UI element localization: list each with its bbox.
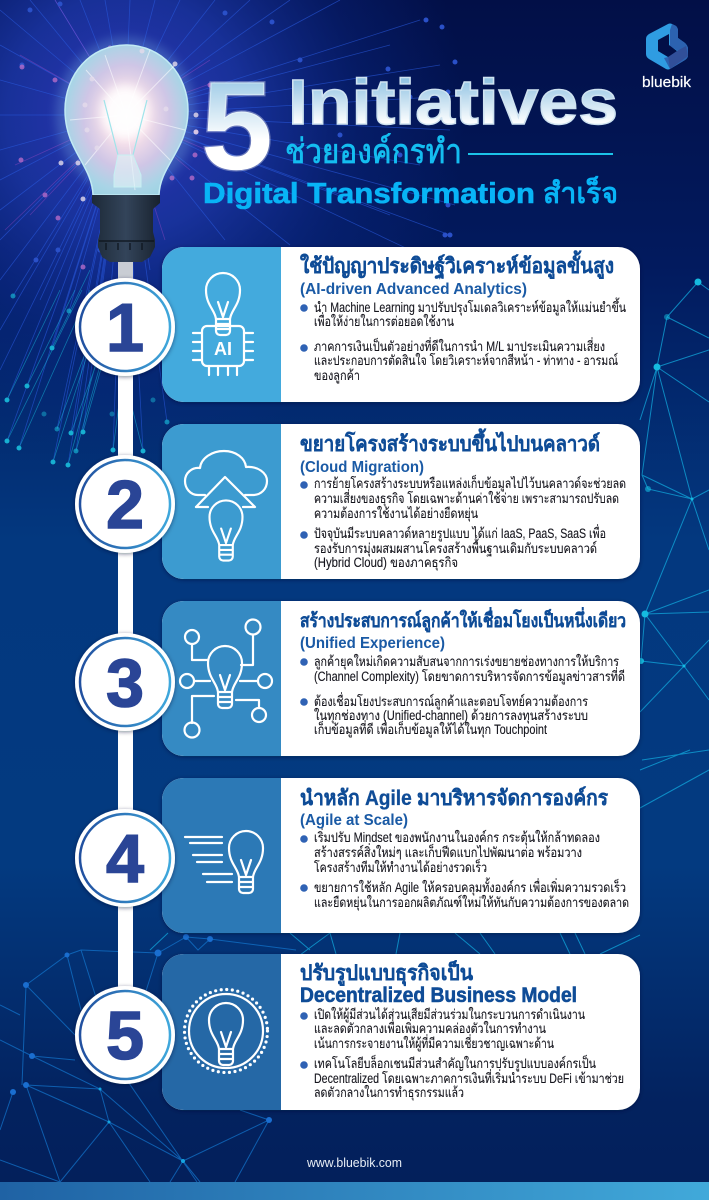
panel: 4 Agile at Scale: สร้างสรรค์สิ่งใหม่ๆ และเก็บฟีดแบกไปพัฒนาต่อ พร้อมวาง <box>314 843 582 860</box>
footer: website: www.bluebik.com <box>306 1155 402 1170</box>
number 1: 1 <box>106 290 144 366</box>
panel: 1 AI-driven Advanced Analytics: นำ Machine Learning มาปรับปรุงโมเดลวิเคราะห์ข้อมูลให้แม่นยำขึ้น <box>314 297 626 316</box>
panel: 4 Agile at Scale: เริ่มปรับ Mindset ของพนักงานในองค์กร กระตุ้นให้กล้าทดลอง <box>314 828 600 846</box>
panel: 2 Cloud Migration: ความต้องการใช้งานได้อย่างยืดหยุ่น <box>314 505 478 522</box>
panel: 3 Unified Experience <box>75 601 640 756</box>
panel: 1 AI-driven Advanced Analytics <box>75 247 640 402</box>
panel: 1 AI-driven Advanced Analytics: เพื่อให้ง่ายในการต่อยอดใช้งาน <box>314 312 454 329</box>
panel: 5 Decentralized Business Model: ลดตัวกลางในการทำธุรกรรมแล้ว <box>314 1084 464 1101</box>
panel: 4 Agile at Scale: โครงสร้างทีมให้ทำงานได้อย่างรวดเร็ว <box>314 858 487 875</box>
panel: 1 AI-driven Advanced Analytics: และประกอบการตัดสินใจ โดยวิเคราะห์จากสีหน้า - ท่าทาง - อารมณ์ <box>314 352 618 368</box>
title: 5 <box>201 55 273 196</box>
panel: 5 Decentralized Business Model: Decentralized Business Model <box>300 984 577 1007</box>
logo: bluebik: bluebik <box>642 74 692 91</box>
number 3 <box>75 633 175 731</box>
panel: 2 Cloud Migration: (Cloud Migration) <box>300 459 424 476</box>
icon: bulb in dotted circle <box>184 990 268 1072</box>
number 5 <box>75 986 175 1084</box>
network lines: bottom left <box>0 937 296 1182</box>
panel: 4 Agile at Scale <box>75 778 640 933</box>
title: ช่วยองค์กรทำ <box>285 133 462 171</box>
panel: 2 Cloud Migration: ปัจจุบันมีระบบคลาวด์หลายรูปแบบ ได้แก่ IaaS, PaaS, SaaS เพื่อ <box>314 524 606 542</box>
panel: 3 Unified Experience: ในทุกช่องทาง (Unified-channel) ด้วยการลงทุนสร้างระบบ <box>314 707 588 724</box>
icon: cloud and bulb <box>185 451 267 561</box>
panel: 5 Decentralized Business Model: และลดตัวกลางเพื่อเพิ่มความคล่องตัวในการทำงาน <box>314 1019 546 1036</box>
panel: 1 AI-driven Advanced Analytics: (AI-driven Advanced Analytics) <box>300 281 527 298</box>
title: Digital Transformation <box>203 178 535 210</box>
number 2 <box>75 455 175 553</box>
panel: 2 Cloud Migration <box>75 424 640 579</box>
icon: AI chip bulb <box>193 273 253 375</box>
panel: 3 Unified Experience: (Channel Complexity) โดยขาดการบริหารจัดการข้อมูลข่าวสารที่ดี <box>314 667 625 685</box>
panel: 2 Cloud Migration: (Hybrid Cloud) ของภาคธุรกิจ <box>314 555 458 571</box>
panel: 1 AI-driven Advanced Analytics: ภาคการเงินเป็นตัวอย่างที่ดีในการนำ M/L มาประเมินความเสี่ยง <box>314 337 605 354</box>
panel: 5 Decentralized Business Model <box>75 954 640 1110</box>
panel: 2 Cloud Migration: ขยายโครงสร้างระบบขึ้นไปบนคลาวด์ <box>300 428 600 456</box>
panel: 3 Unified Experience: (Unified Experience) <box>300 635 445 652</box>
panel: 5 Decentralized Business Model: เน้นการกระจายงานให้ผู้ที่มีความเชี่ยวชาญเฉพาะด้าน <box>314 1034 554 1052</box>
panel: 5 Decentralized Business Model: Decentralized โดยเฉพาะภาคการเงินที่เริ่มนำระบบ DeFi เข้ามาช่วย <box>314 1069 624 1086</box>
icon: bulb socket <box>92 195 160 262</box>
panel: 3 Unified Experience: ลูกค้ายุคใหม่เกิดความสับสนจากการเร่งขยายช่องทางการให้บริการ <box>314 653 619 670</box>
panel: 3 Unified Experience: ต้องเชื่อมโยงประสบการณ์ลูกค้าและตอบโจทย์ความต้องการ <box>314 692 588 710</box>
panel: 1 AI-driven Advanced Analytics: ของลูกค้า <box>314 368 360 384</box>
icon: speed lines and bulb <box>185 831 263 893</box>
icon: AI chip bulb: AI <box>214 339 232 359</box>
number 4: 4 <box>106 821 144 897</box>
title <box>201 55 618 210</box>
panel: 2 Cloud Migration: การย้ายโครงสร้างระบบหรือแหล่งเก็บข้อมูลไปไว้บนคลาวด์จะช่วยลด <box>314 474 626 492</box>
footer bar <box>0 1182 709 1200</box>
panel: 4 Agile at Scale: (Agile at Scale) <box>300 812 408 829</box>
number 2: 2 <box>106 467 144 543</box>
panel: 3 Unified Experience: เก็บข้อมูลที่ดี เพื่อเก็บข้อมูลให้ได้ในทุก Touchpoint <box>314 720 547 738</box>
panel: 5 Decentralized Business Model: เทคโนโลยีบล็อกเชนมีส่วนสำคัญในการปรับรูปแบบองค์กรเป็น <box>314 1054 596 1072</box>
panel: 5 Decentralized Business Model: เปิดให้ผู้มีส่วนได้ส่วนเสียมีส่วนร่วมในกระบวนการดำเนินงาน <box>314 1006 585 1023</box>
logo: bluebik <box>642 24 692 91</box>
icon: glowing light bulb <box>56 37 198 202</box>
panel: 5 Decentralized Business Model: ปรับรูปแบบธุรกิจเป็น <box>300 959 474 987</box>
icon: connected bulb <box>180 620 272 738</box>
number 4 <box>75 809 175 907</box>
panel: 4 Agile at Scale: ขยายการใช้หลัก Agile ให้ครอบคลุมทั้งองค์กร เพื่อเพิ่มความรวดเร็ว <box>314 877 626 896</box>
title: Initiatives <box>288 66 618 138</box>
panel: 4 Agile at Scale: และยืดหยุ่นในการออกผลิตภัณฑ์ใหม่ให้ทันกับความต้องการของตลาด <box>314 894 629 911</box>
number 1 <box>75 278 175 376</box>
vertical rail <box>118 262 133 987</box>
panel: 2 Cloud Migration: ความเสี่ยงของธุรกิจ โดยเฉพาะด้านค่าใช้จ่าย เพราะสามารถปรับลด <box>314 489 619 507</box>
panel: 3 Unified Experience: สร้างประสบการณ์ลูกค้าให้เชื่อมโยงเป็นหนึ่งเดียว <box>300 607 626 633</box>
network lines: right <box>150 282 709 955</box>
panel: 2 Cloud Migration: รองรับการมุ่งผสมผสานโครงสร้างพื้นฐานเดิมกับระบบคลาวด์ <box>314 538 597 557</box>
panel: 4 Agile at Scale: นำหลัก Agile มาบริหารจัดการองค์กร <box>300 786 609 810</box>
panel: 1 AI-driven Advanced Analytics: ใช้ปัญญาประดิษฐ์วิเคราะห์ข้อมูลขั้นสูง <box>300 250 614 280</box>
title: สำเร็จ <box>543 175 618 210</box>
number 5: 5 <box>106 998 144 1074</box>
number 3: 3 <box>106 645 144 721</box>
